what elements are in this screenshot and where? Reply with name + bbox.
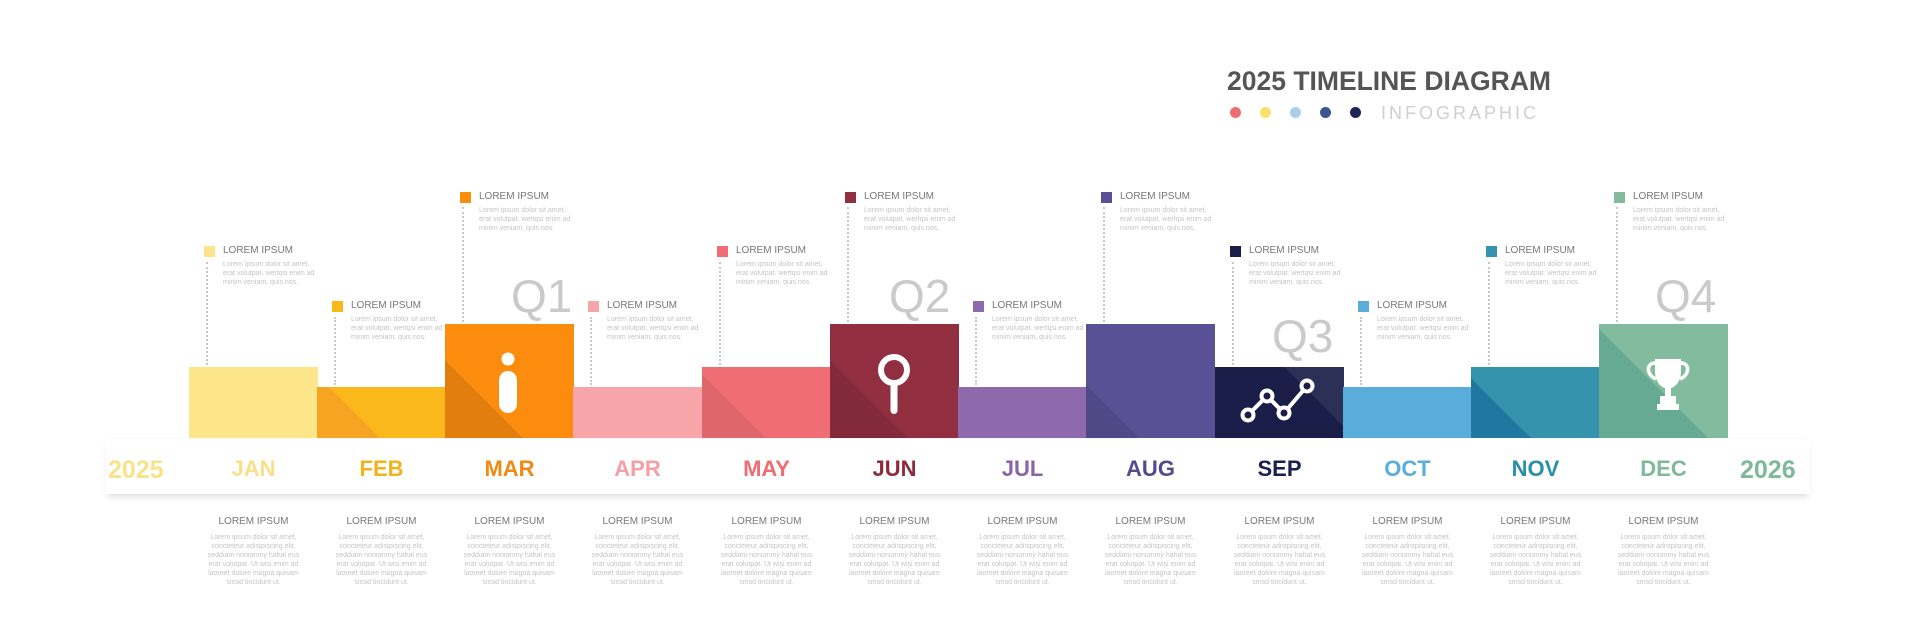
bottom descriptions: LOREM IPSUM	[731, 516, 802, 527]
bottom descriptions: Lorem ipsum dolor sit amet, concteteur adistpiscing elit, seddiam nonummy hahal eus erat volutpat. Ut wisi enim ad laoreet dolore magna quisam smsd tincidunt ut.	[1490, 534, 1581, 586]
bottom descriptions: LOREM IPSUM	[1628, 516, 1698, 527]
bottom descriptions: Lorem ipsum dolor sit amet, concteteur adistpiscing elit, seddiam nonummy hahal eus erat volutpat. Ut wisi enim ad laoreet dolore magna quisam smsd tincidunt ut.	[592, 534, 683, 586]
callout: aug: Lorem ipsum dolor sit amet, erat volutpat. wertqsi enim ad minim veniam, quis nos.	[1120, 207, 1211, 232]
bottom descriptions: LOREM IPSUM	[1372, 516, 1442, 527]
bottom descriptions: Lorem ipsum dolor sit amet, concteteur adistpiscing elit, seddiam nonummy hahal eus erat volutpat. Ut wisi enim ad laoreet dolore magna quisam smsd tincidunt ut.	[1618, 534, 1709, 586]
callout: apr: Lorem ipsum dolor sit amet, erat volutpat. wertqsi enim ad minim veniam, quis nos.	[607, 316, 698, 341]
Q labels: Q1	[511, 270, 572, 322]
callout: dec	[1614, 191, 1724, 232]
bottom descriptions: Lorem ipsum dolor sit amet, concteteur adistpiscing elit, seddiam nonummy hahal eus erat volutpat. Ut wisi enim ad laoreet dolore magna quisam smsd tincidunt ut.	[208, 534, 299, 586]
callout: nov: Lorem ipsum dolor sit amet, erat volutpat. wertqsi enim ad minim veniam, quis nos.	[1505, 261, 1596, 286]
callout: mar	[460, 191, 570, 232]
bottom descriptions: Lorem ipsum dolor sit amet, concteteur adistpiscing elit, seddiam nonummy hahal eus erat volutpat. Ut wisi enim ad laoreet dolore magna quisam smsd tincidunt ut.	[1105, 534, 1196, 586]
callout: jul: LOREM IPSUM	[992, 300, 1062, 311]
callout: jul	[973, 300, 1083, 341]
callout: jun	[845, 191, 955, 232]
callout: may	[717, 245, 827, 286]
month labels: MAY	[743, 456, 790, 481]
callout: jan	[204, 245, 314, 286]
month labels: OCT	[1384, 456, 1431, 481]
legend dots	[1230, 107, 1361, 118]
bottom descriptions: Lorem ipsum dolor sit amet, concteteur adistpiscing elit, seddiam nonummy hahal eus erat volutpat. Ut wisi enim ad laoreet dolore magna quisam smsd tincidunt ut.	[849, 534, 940, 586]
bottom descriptions: LOREM IPSUM	[474, 516, 544, 527]
callout: sep	[1230, 245, 1340, 286]
subtitle: INFOGRAPHIC	[1381, 103, 1539, 123]
bottom descriptions: LOREM IPSUM	[987, 516, 1058, 527]
month labels: APR	[614, 456, 661, 481]
callout: dec: Lorem ipsum dolor sit amet, erat volutpat. wertqsi enim ad minim veniam, quis nos.	[1633, 207, 1724, 232]
callout: oct: Lorem ipsum dolor sit amet, erat volutpat. wertqsi enim ad minim veniam, quis nos.	[1377, 316, 1468, 341]
text: Q4	[1655, 270, 1716, 322]
icon: line chart	[1240, 378, 1314, 422]
bottom descriptions: Lorem ipsum dolor sit amet, concteteur adistpiscing elit, seddiam nonummy hahal eus erat volutpat. Ut wisi enim ad laoreet dolore magna quisam smsd tincidunt ut.	[1234, 534, 1325, 586]
callout: sep: Lorem ipsum dolor sit amet, erat volutpat. wertqsi enim ad minim veniam, quis nos.	[1249, 261, 1340, 286]
callout: sep: LOREM IPSUM	[1249, 245, 1319, 256]
callout: feb: Lorem ipsum dolor sit amet, erat volutpat. wertqsi enim ad minim veniam, quis nos.	[351, 316, 442, 341]
dotted connectors	[206, 262, 208, 365]
month labels: AUG	[1126, 456, 1175, 481]
callout: jun: Lorem ipsum dolor sit amet, erat volutpat. wertqsi enim ad minim veniam, quis nos.	[864, 207, 955, 232]
month labels: JUN	[872, 456, 916, 481]
callout: apr	[588, 300, 698, 341]
icon: trophy	[1646, 359, 1690, 410]
callout: may: LOREM IPSUM	[736, 245, 806, 256]
text: Q2	[889, 270, 950, 322]
bottom descriptions	[208, 516, 1709, 586]
callout: apr: LOREM IPSUM	[607, 300, 677, 311]
month labels: JAN	[231, 456, 276, 481]
month labels: DEC	[1640, 456, 1687, 481]
month labels: JUL	[1002, 456, 1043, 481]
callout: jun: LOREM IPSUM	[864, 191, 934, 202]
bottom descriptions: Lorem ipsum dolor sit amet, concteteur adistpiscing elit, seddiam nonummy hahal eus erat volutpat. Ut wisi enim ad laoreet dolore magna quisam smsd tincidunt ut.	[336, 534, 427, 586]
callout: feb	[332, 300, 442, 341]
bottom descriptions: Lorem ipsum dolor sit amet, concteteur adistpiscing elit, seddiam nonummy hahal eus erat volutpat. Ut wisi enim ad laoreet dolore magna quisam smsd tincidunt ut.	[1362, 534, 1453, 586]
icon: person	[499, 352, 517, 413]
callout: mar: Lorem ipsum dolor sit amet, erat volutpat. wertqsi enim ad minim veniam, quis nos.	[479, 207, 570, 232]
year 2025: 2025	[108, 456, 164, 484]
title: 2025 TIMELINE DIAGRAM	[1227, 66, 1551, 96]
label band	[105, 439, 1810, 494]
callout: jan: Lorem ipsum dolor sit amet, erat volutpat. wertqsi enim ad minim veniam, quis nos.	[223, 261, 314, 286]
bottom descriptions: LOREM IPSUM	[602, 516, 672, 527]
callout: jul: Lorem ipsum dolor sit amet, erat volutpat. wertqsi enim ad minim veniam, quis nos.	[992, 316, 1083, 341]
bars	[189, 367, 318, 438]
bottom descriptions: Lorem ipsum dolor sit amet, concteteur adistpiscing elit, seddiam nonummy hahal eus erat volutpat. Ut wisi enim ad laoreet dolore magna quisam smsd tincidunt ut.	[977, 534, 1068, 586]
month labels: NOV	[1512, 456, 1559, 481]
bottom descriptions: LOREM IPSUM	[1500, 516, 1570, 527]
bottom descriptions: LOREM IPSUM	[346, 516, 416, 527]
bottom descriptions: Lorem ipsum dolor sit amet, concteteur adistpiscing elit, seddiam nonummy hahal eus erat volutpat. Ut wisi enim ad laoreet dolore magna quisam smsd tincidunt ut.	[721, 534, 812, 586]
callout: nov	[1486, 245, 1596, 286]
bottom descriptions: LOREM IPSUM	[1244, 516, 1314, 527]
month labels: SEP	[1257, 456, 1302, 481]
bottom descriptions: LOREM IPSUM	[859, 516, 930, 527]
callout: nov: LOREM IPSUM	[1505, 245, 1575, 256]
callout: aug: LOREM IPSUM	[1120, 191, 1190, 202]
callout: dec: LOREM IPSUM	[1633, 191, 1703, 202]
month labels	[231, 456, 1687, 481]
month labels: MAR	[484, 456, 535, 481]
callout: mar: LOREM IPSUM	[479, 191, 549, 202]
bottom descriptions: Lorem ipsum dolor sit amet, concteteur adistpiscing elit, seddiam nonummy hahal eus erat volutpat. Ut wisi enim ad laoreet dolore magna quisam smsd tincidunt ut.	[464, 534, 555, 586]
icon: magnifier	[878, 354, 910, 414]
bottom descriptions: LOREM IPSUM	[1115, 516, 1186, 527]
text: Q3	[1272, 310, 1333, 362]
callout: feb: LOREM IPSUM	[351, 300, 421, 311]
month labels: FEB	[360, 456, 404, 481]
callout: oct: LOREM IPSUM	[1377, 300, 1447, 311]
callout: jan: LOREM IPSUM	[223, 245, 293, 256]
year 2026: 2026	[1740, 456, 1796, 484]
callout: may: Lorem ipsum dolor sit amet, erat volutpat. wertqsi enim ad minim veniam, quis nos.	[736, 261, 827, 286]
bottom descriptions: LOREM IPSUM	[218, 516, 288, 527]
callout: oct	[1358, 300, 1468, 341]
callout: aug	[1101, 191, 1211, 232]
